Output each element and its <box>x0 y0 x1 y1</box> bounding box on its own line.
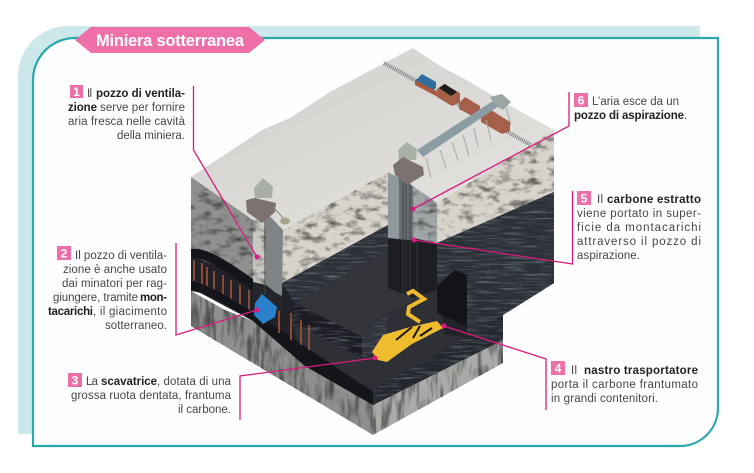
lower black seam <box>191 281 373 405</box>
callout 5 <box>412 191 701 264</box>
conveyor bridge <box>417 94 511 178</box>
coal band centre <box>282 225 388 303</box>
light teal background band <box>18 26 700 434</box>
yellow excavator <box>372 321 443 362</box>
callout 6: . <box>684 110 687 122</box>
leader line 3 <box>240 358 375 420</box>
callout 4: porta il carbone frantumato <box>551 379 698 391</box>
callout 2: giungere, tramite <box>53 292 138 304</box>
leader line 5 <box>414 191 572 264</box>
front coal wall right <box>373 315 503 405</box>
badge 3 <box>68 373 82 387</box>
right block face <box>467 256 503 337</box>
callout 5: ficie da montacarichi <box>577 222 701 234</box>
callout 1: pozzo di ventila- <box>96 88 185 100</box>
grey rock base <box>191 291 503 435</box>
red support pillars left <box>194 260 249 312</box>
coal band right <box>437 192 554 315</box>
leader line 4 <box>444 326 546 410</box>
callout 6 <box>410 92 687 212</box>
callout 3: il carbone. <box>178 404 231 416</box>
callout 3: 3 <box>72 374 79 388</box>
badge 5 <box>577 191 591 205</box>
callout 2: dai minatori per rag- <box>62 278 167 290</box>
callout 3: La <box>86 376 99 388</box>
badge 2 <box>57 246 71 260</box>
left ventilation shaft <box>253 210 283 312</box>
callout 4: 4 <box>555 362 562 376</box>
callout 1: serve per fornire <box>100 102 185 114</box>
interior dark mass <box>191 192 554 405</box>
callout 1: Il <box>87 88 92 100</box>
lower floor <box>292 290 467 390</box>
callout 2: Il pozzo di ventila- <box>75 250 167 262</box>
callout 6: pozzo di aspirazione <box>574 110 684 122</box>
leader line 2 <box>176 243 257 335</box>
callout 1: zione <box>68 102 97 114</box>
callout 3: scavatrice <box>101 376 157 388</box>
callout 5: aspirazione. <box>577 250 640 262</box>
teal frame <box>33 38 718 446</box>
callout 5: Il <box>597 194 603 206</box>
callout 4: in grandi contenitori. <box>551 393 658 405</box>
mine cross-section illustration <box>191 48 554 435</box>
callout 2: mon- <box>140 292 167 304</box>
right exhaust shaft <box>388 172 437 300</box>
callout 3 <box>68 356 378 420</box>
callout 1 <box>68 85 260 260</box>
callout 6: L’aria esce da un <box>592 96 679 108</box>
callout 4: Il <box>571 365 577 377</box>
callout 1: della miniera. <box>117 130 185 142</box>
upper black seam <box>191 249 262 290</box>
callout 3: , dotata di una <box>157 376 232 388</box>
callout 5: 5 <box>581 192 588 206</box>
callout 2: 2 <box>61 246 68 260</box>
callout 3: grossa ruota dentata, frantuma <box>71 390 232 402</box>
right headframe <box>393 142 424 185</box>
left headframe <box>246 178 290 224</box>
marble rock face centre <box>282 172 388 283</box>
callout 2: , il giacimento <box>93 306 167 318</box>
badge 6 <box>574 93 588 107</box>
platform front side <box>362 313 387 358</box>
train <box>415 74 510 134</box>
callout 6: 6 <box>578 94 585 108</box>
title: Miniera sotterranea <box>96 32 245 50</box>
callout 1: 1 <box>73 85 80 99</box>
callout 4 <box>442 324 698 410</box>
callout 1: aria fresca nelle cavità <box>68 116 186 128</box>
callout 4: nastro trasportatore <box>584 365 698 377</box>
top surface <box>191 48 554 230</box>
title <box>75 27 265 53</box>
callout 5: viene portato in super- <box>577 208 701 220</box>
callout 2: tacarichi <box>48 306 93 318</box>
blue lift cage <box>254 294 277 324</box>
red support pillars right <box>279 308 309 350</box>
railway <box>384 63 531 145</box>
badge 4 <box>551 361 565 375</box>
badge 1 <box>70 85 83 98</box>
callout 2: zione è anche usato <box>63 264 167 276</box>
inner dark block <box>437 270 467 326</box>
upper room floor <box>295 250 437 337</box>
platform left side <box>292 303 362 358</box>
marble rock face right <box>437 130 554 243</box>
leader line 6 <box>413 92 569 209</box>
callout 5: attraverso il pozzo di <box>577 236 701 248</box>
callout 2: sotterraneo. <box>105 320 167 332</box>
leader line 1 <box>194 86 257 257</box>
upper yellow machine <box>407 291 424 322</box>
callout 2 <box>48 243 260 335</box>
callout 5: carbone estratto <box>607 194 701 206</box>
left rock face <box>191 177 253 282</box>
